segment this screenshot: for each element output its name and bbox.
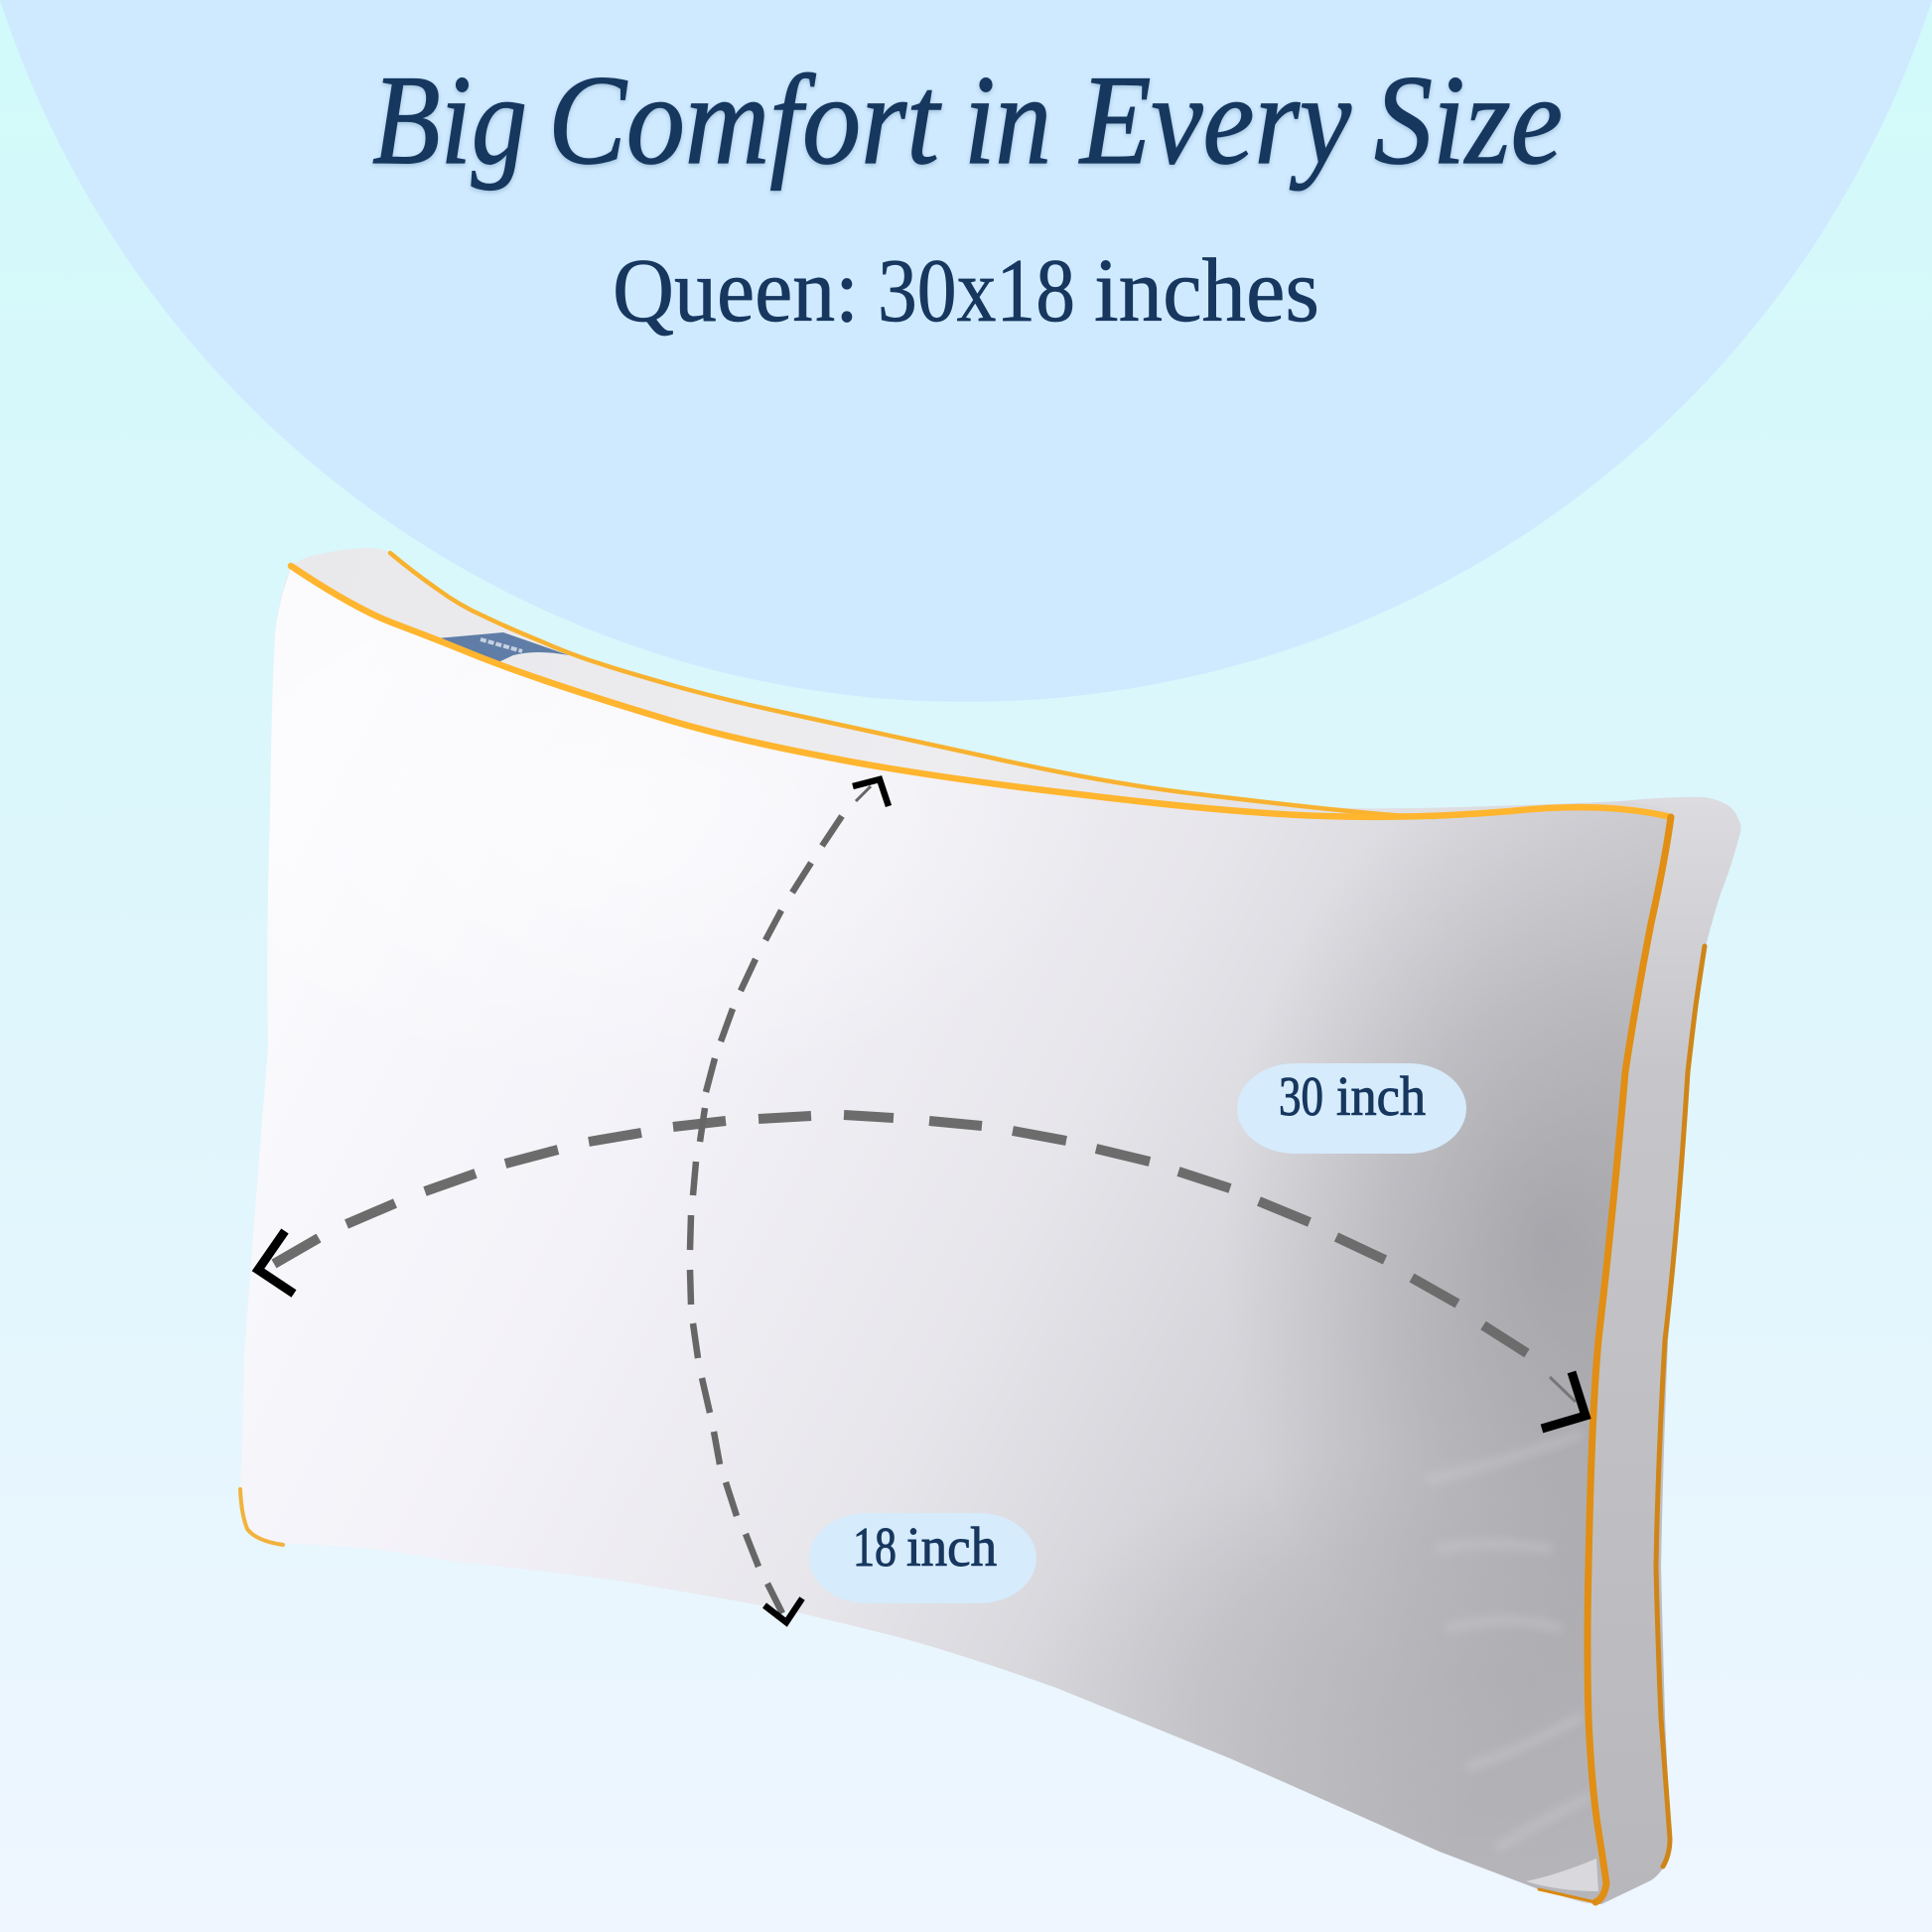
top arrowhead [853,779,889,806]
pillow [238,548,1741,1906]
title: Comfort [548,49,942,191]
title: in [964,49,1051,191]
bottom corner piping [1539,1889,1595,1902]
pillow silhouette and top gusset [240,548,1741,1904]
width measurement arrow [258,1115,1586,1429]
front side piping [1587,817,1671,1902]
badge: 30 inch: 30 [1279,1066,1323,1128]
back top piping [390,553,1435,817]
badge: 30 inch [1237,1063,1466,1154]
bottom-left piping [240,1489,283,1545]
fabric tag [437,632,569,662]
badge: 18 inch: inch [906,1517,997,1579]
title: Size [1374,49,1563,191]
subtitle: 30x18 [878,240,1075,341]
bottom arrowhead [764,1598,802,1622]
badge: 30 inch: inch [1336,1066,1426,1128]
dashed width curve [274,1115,1527,1353]
front top piping [291,566,1671,817]
badge: 18 inch: 18 [853,1517,897,1579]
title: Every [1078,49,1352,191]
right side gusset [1587,797,1741,1904]
title [372,49,1563,191]
dashed height curve [690,816,842,1613]
title: Big [372,49,527,191]
bottom-right corner fold [1526,1859,1598,1891]
badge: 18 inch [809,1513,1036,1603]
left arrowhead [258,1231,294,1294]
pillow front face [240,570,1667,1900]
subtitle: inches [1094,240,1319,341]
height measurement arrow [690,779,889,1622]
subtitle [613,240,1319,341]
subtitle: Queen: [613,240,859,341]
back side piping [1656,946,1705,1866]
header circle [0,0,1932,702]
fabric wrinkles [1430,1435,1588,1847]
top arrow shaft tail [856,786,871,801]
right arrowhead [1542,1372,1586,1429]
